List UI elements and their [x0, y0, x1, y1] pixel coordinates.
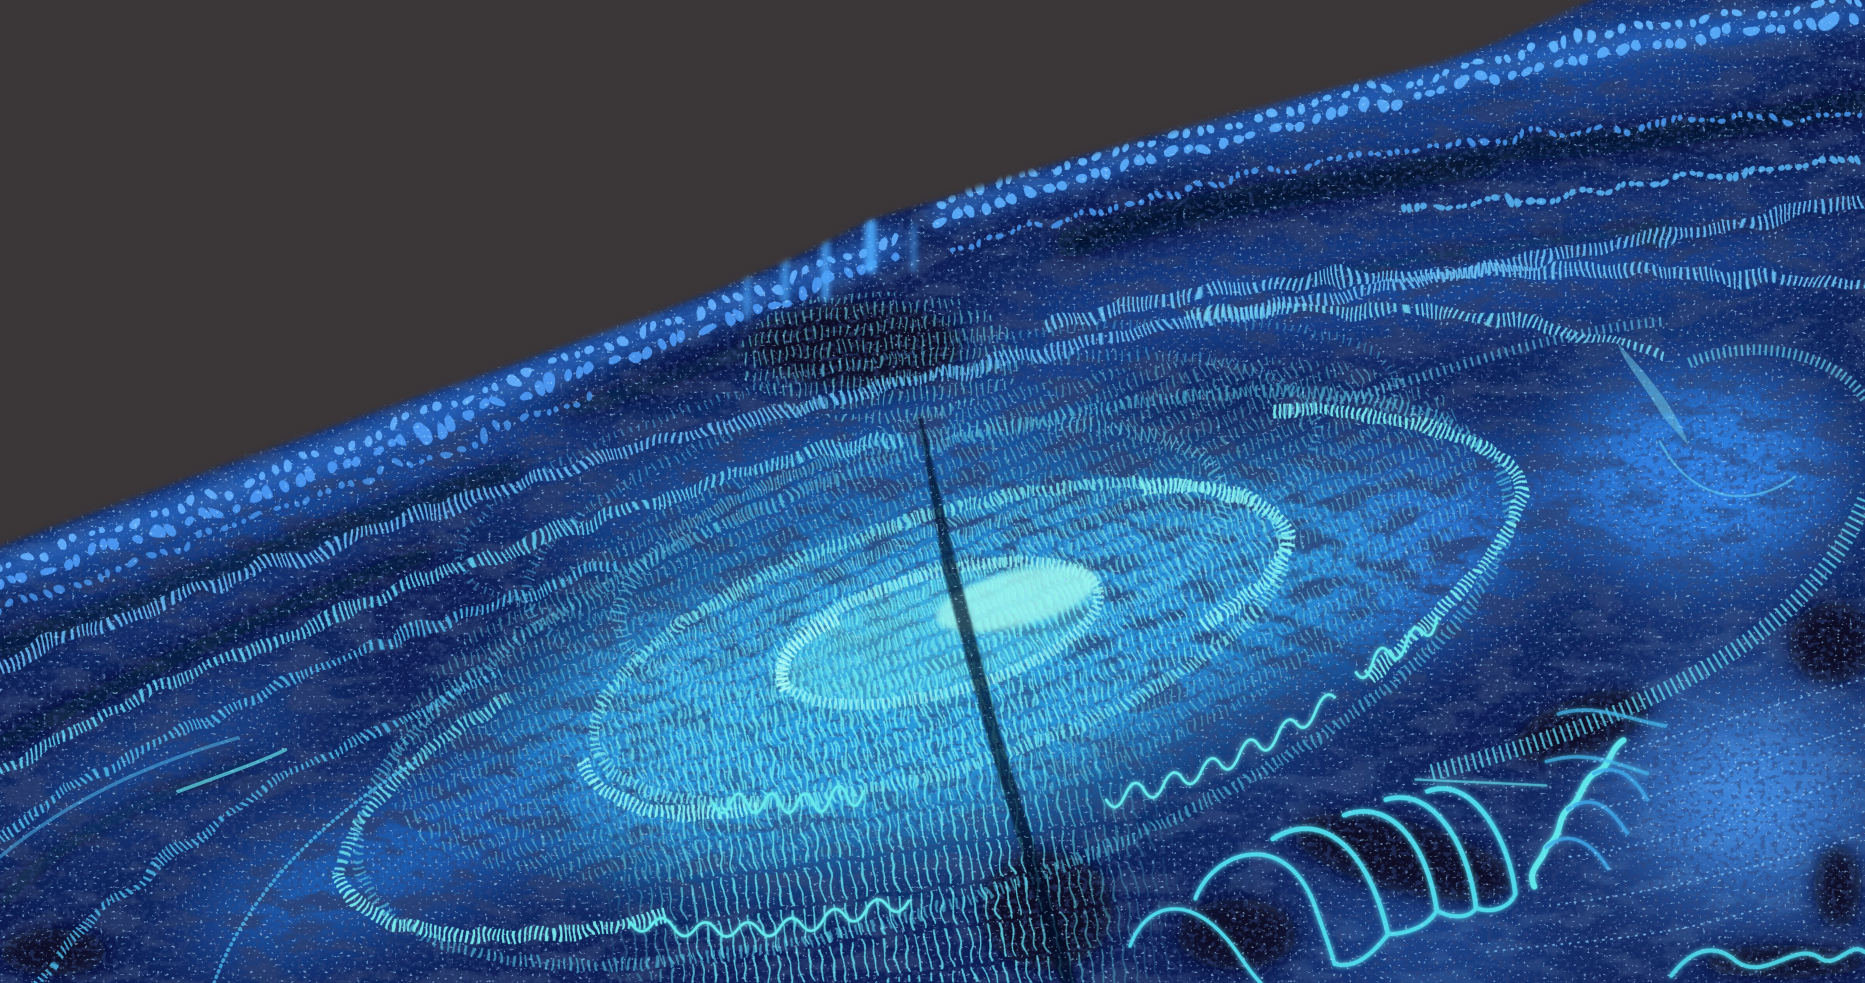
middle ring	[559, 417, 1320, 868]
central and lower-right blue haze	[595, 405, 1865, 976]
lower streak fan	[595, 643, 1189, 983]
central comb texture	[328, 250, 1539, 983]
bottom-left sweeping arcs	[0, 738, 416, 983]
right swirl	[1285, 321, 1865, 774]
vertical spikes at crest centre	[747, 224, 913, 317]
central upward streak field	[737, 292, 1023, 422]
ripple arcs around the rings	[630, 618, 1437, 937]
outer ring	[291, 273, 1577, 983]
comb-textured mid ridges	[0, 202, 1865, 983]
scalloped ripple chain, lower right	[1130, 710, 1865, 983]
crest particle ridges	[0, 0, 1865, 613]
central dark seam	[918, 417, 1076, 983]
inner ring	[763, 533, 1116, 737]
dotted grid lines on blue haze	[1487, 678, 1865, 952]
crest glow bands	[0, 12, 1865, 571]
concentric comb rings	[438, 262, 1417, 745]
